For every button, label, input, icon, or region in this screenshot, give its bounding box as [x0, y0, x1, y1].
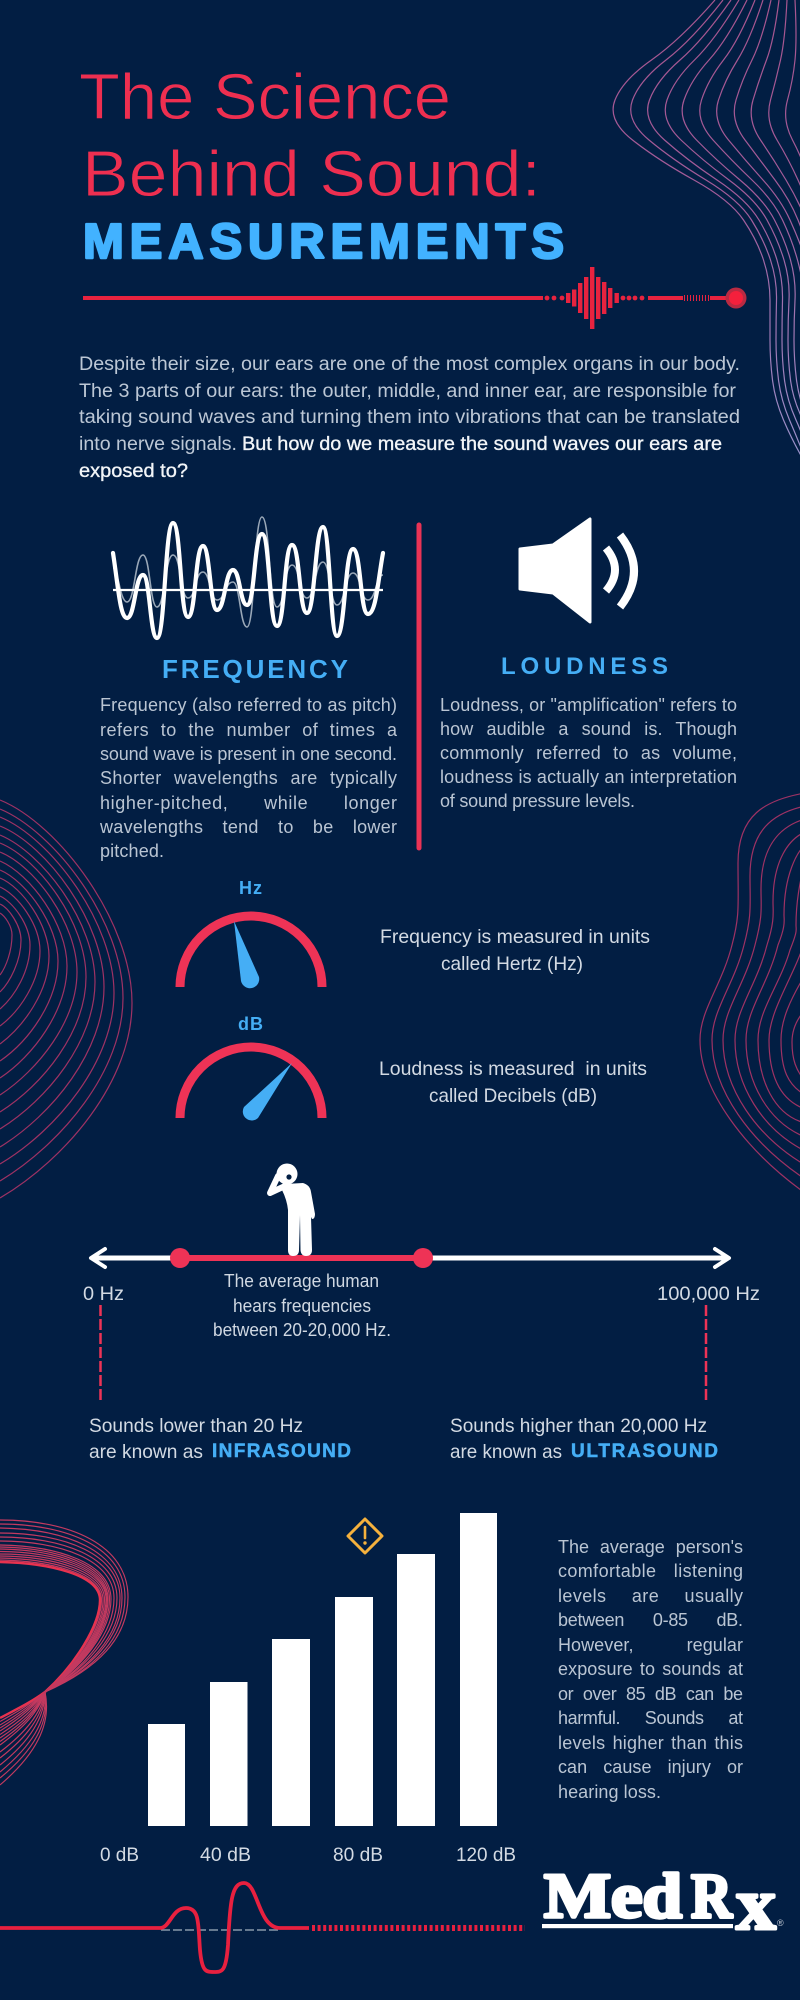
arrow: left [91, 1249, 105, 1267]
text: frequency unit: Frequency is measured in units [380, 926, 650, 948]
infrasound callout [89, 1415, 351, 1463]
infrasound callout: INFRASOUND [212, 1441, 351, 1462]
axis labels [83, 1283, 760, 1305]
decorative wave: right [700, 793, 800, 1193]
title: Behind Sound: [82, 137, 541, 210]
ultrasound callout [450, 1415, 718, 1463]
title: The Science [79, 60, 451, 133]
listening levels text block: comfortable listening [558, 1561, 743, 1581]
frequency text block: Frequency (also referred to as pitch) [100, 695, 397, 715]
icon: frequency waveform [113, 517, 383, 638]
loudness text block [440, 695, 737, 811]
intro paragraph: taking sound waves and turning them into vibrations that can be translated [79, 407, 740, 428]
infrasound callout: are known as [89, 1441, 203, 1463]
frequency text block [99, 695, 398, 861]
gauge: dB: dB [238, 1014, 264, 1034]
listening levels text block [558, 1537, 743, 1802]
logo: MedRx: x [736, 1864, 776, 1946]
frequency text block: Shorter wavelengths are typically [100, 768, 397, 788]
icon: speaker [520, 519, 634, 622]
dashed connectors [100, 1305, 706, 1402]
heading: frequency: FREQUENCY [162, 654, 348, 684]
title [79, 60, 564, 269]
text: average hearing range: hears frequencies [233, 1296, 371, 1316]
infrasound callout: Sounds lower than 20 Hz [89, 1415, 303, 1437]
arrow: right [715, 1249, 729, 1267]
bar chart labels [100, 1844, 516, 1866]
text: average hearing range: The average human [224, 1271, 379, 1291]
logo: MedRx: ® [777, 1918, 784, 1928]
heading: loudness: LOUDNESS [501, 653, 668, 680]
bar chart [148, 1513, 497, 1826]
bar chart labels: 0 dB [100, 1844, 139, 1866]
intro paragraph: Despite their size, our ears are one of the most complex organs in our body. [79, 354, 740, 375]
decorative wave: top right [613, 0, 800, 460]
frequency text block: pitched. [100, 841, 164, 861]
icon: person listening [270, 1164, 315, 1256]
frequency text block: higher-pitched, while longer [100, 793, 397, 813]
logo: MedRx: Med [544, 1860, 682, 1931]
logo: MedRx: R [691, 1860, 733, 1931]
listening levels text block: exposure to sounds at [558, 1659, 743, 1679]
ultrasound callout: Sounds higher than 20,000 Hz [450, 1415, 707, 1437]
listening levels text block: However, regular [558, 1635, 743, 1655]
listening levels text block: harmful. Sounds at [558, 1708, 743, 1728]
audible range segment [170, 1248, 433, 1268]
listening levels text block: can cause injury or [558, 1757, 743, 1777]
intro paragraph: The 3 parts of our ears: the outer, middle, and inner ear, are responsible for [79, 381, 737, 402]
frequency text block: refers to the number of times a [100, 720, 398, 740]
intro paragraph [79, 354, 740, 482]
axis labels: 0 Hz [83, 1283, 124, 1305]
intro paragraph: exposed to? [79, 461, 188, 482]
listening levels text block: levels higher than this [558, 1733, 743, 1753]
frequency text block: sound wave is present in one second. [100, 744, 397, 764]
decorative wave: left [0, 800, 132, 1198]
listening levels text block: or over 85 dB can be [558, 1684, 743, 1704]
bottom sound wave [0, 1883, 525, 1972]
intro paragraph: into nerve signals. [79, 434, 237, 455]
frequency text block: wavelengths tend to be lower [99, 817, 397, 837]
header sound wave line [83, 267, 746, 329]
text: average hearing range [213, 1271, 391, 1340]
ultrasound callout: ULTRASOUND [571, 1441, 718, 1462]
axis labels: 100,000 Hz [657, 1283, 760, 1305]
listening levels text block: levels are usually [558, 1586, 743, 1606]
decorative wave: bottom left ear shape [0, 1520, 128, 1785]
title: MEASUREMENTS [83, 215, 564, 269]
loudness text block: loudness is actually an interpretation [440, 767, 737, 787]
loudness text block: Loudness, or "amplification" refers to [440, 695, 737, 715]
intro paragraph: But how do we measure the sound waves our ears are [242, 434, 722, 455]
text: frequency unit: called Hertz (Hz) [441, 953, 583, 975]
text: frequency unit [380, 926, 650, 975]
text: loudness unit [379, 1058, 647, 1107]
gauge: Hz: Hz [239, 878, 263, 898]
logo: MedRx [542, 1860, 784, 1946]
listening levels text block: The average person's [558, 1537, 743, 1557]
text: loudness unit: called Decibels (dB) [429, 1085, 597, 1107]
loudness text block: commonly referred to as volume, [440, 743, 737, 763]
listening levels text block: hearing loss. [558, 1782, 661, 1802]
bar chart labels: 40 dB [200, 1844, 251, 1866]
frequency range axis [91, 1248, 729, 1268]
text: loudness unit: Loudness is measured in units [379, 1058, 647, 1080]
text: average hearing range: between 20-20,000 Hz. [213, 1320, 391, 1340]
divider [416, 525, 422, 848]
gauge: Hz [180, 878, 322, 988]
icon: warning [348, 1519, 382, 1553]
loudness text block: how audible a sound is. Though [440, 719, 737, 739]
listening levels text block: between 0-85 dB. [558, 1610, 743, 1630]
ultrasound callout: are known as [450, 1441, 562, 1463]
loudness text block: of sound pressure levels. [440, 791, 635, 811]
bar chart labels: 120 dB [456, 1844, 516, 1866]
gauge: dB [180, 1014, 322, 1120]
bar chart labels: 80 dB [333, 1844, 383, 1866]
